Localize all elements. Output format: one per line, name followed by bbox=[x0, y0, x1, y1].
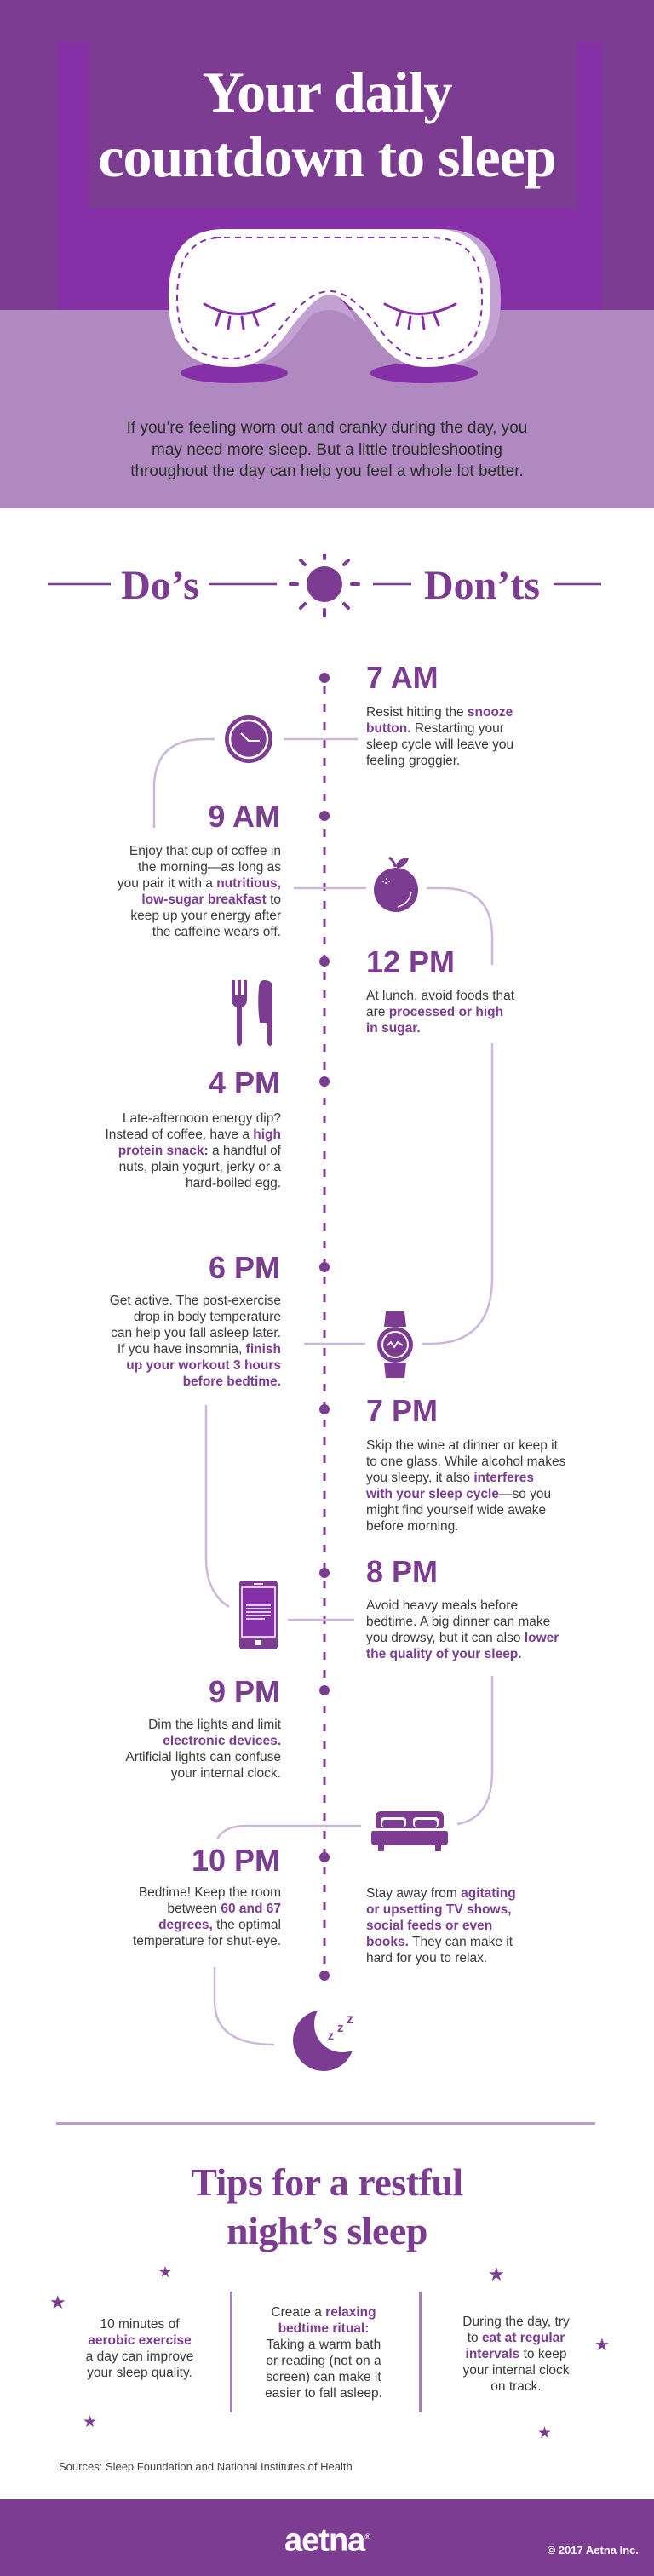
text: If you have insomnia, finish bbox=[118, 1342, 281, 1357]
tip 2: Create a relaxing bbox=[271, 2305, 376, 2320]
entry: 7 AM: 7 AM bbox=[366, 660, 439, 695]
text: Artificial lights can confuse bbox=[125, 1750, 281, 1764]
stars: ★ bbox=[537, 2424, 552, 2442]
stars: ★ bbox=[158, 2263, 172, 2281]
text: you sleepy, it also interferes bbox=[366, 1471, 534, 1485]
icon: moon with zzz bbox=[293, 2010, 353, 2071]
entry: 7 PM: 7 PM bbox=[366, 1393, 438, 1428]
text: low-sugar breakfast to bbox=[141, 892, 281, 907]
stars: ★ bbox=[594, 2336, 610, 2355]
icon: sun bbox=[290, 552, 359, 617]
timeline with connectors and icons bbox=[153, 673, 494, 2071]
stars bbox=[49, 2263, 610, 2442]
icon: fork and knife bbox=[232, 980, 272, 1046]
tip 1: aerobic exercise bbox=[88, 2333, 192, 2348]
heading: tips bbox=[191, 2160, 463, 2252]
entry: 10 PM don't bbox=[366, 1886, 516, 1965]
entry: 10 PM don't: books. They can make it bbox=[366, 1935, 513, 1949]
text: At lunch, avoid foods that bbox=[366, 989, 514, 1003]
icon: clock bbox=[225, 715, 272, 763]
text: keep up your energy after bbox=[130, 909, 281, 923]
text: Instead of coffee, have a high bbox=[105, 1127, 281, 1142]
text: protein snack: a handful of bbox=[118, 1144, 281, 1158]
icon: moon with zzz: z bbox=[347, 2012, 353, 2027]
text: your internal clock. bbox=[171, 1766, 281, 1781]
text: in sugar. bbox=[366, 1021, 421, 1036]
tip 1: your sleep quality. bbox=[87, 2366, 192, 2380]
text: nuts, plain yogurt, jerky or a bbox=[119, 1160, 281, 1174]
tip 3: your internal clock bbox=[463, 2363, 569, 2378]
text: are processed or high bbox=[366, 1005, 503, 1019]
entry: 10 PM don't: social feeds or even bbox=[366, 1919, 492, 1933]
tip 2 bbox=[265, 2305, 382, 2401]
text: bedtime. A big dinner can make bbox=[366, 1615, 550, 1629]
stars: ★ bbox=[49, 2292, 66, 2313]
icon: bed bbox=[371, 1811, 448, 1851]
text: between 60 and 67 bbox=[167, 1902, 281, 1916]
tip 1: a day can improve bbox=[86, 2349, 193, 2364]
text: you drowsy, but it can also lower bbox=[366, 1631, 559, 1645]
text: can help you fall asleep later. bbox=[111, 1326, 281, 1340]
text: sleep cycle will leave you bbox=[366, 737, 513, 752]
tip 3: to eat at regular bbox=[468, 2331, 565, 2345]
text: temperature for shut-eye. bbox=[133, 1934, 281, 1948]
icon: sleep mask bbox=[169, 229, 501, 383]
text: Avoid heavy meals before bbox=[366, 1598, 518, 1613]
tip 3: intervals to keep bbox=[466, 2347, 566, 2361]
text: you pair it with a nutritious, bbox=[118, 876, 281, 891]
intro text bbox=[127, 419, 527, 480]
text: electronic devices. bbox=[163, 1734, 281, 1748]
entry: 9 AM: 9 AM bbox=[208, 799, 280, 834]
header background bbox=[0, 0, 654, 508]
text: feeling groggier. bbox=[366, 754, 460, 768]
tip 3 bbox=[462, 2315, 570, 2394]
intro text: If you’re feeling worn out and cranky during the day, you bbox=[127, 419, 527, 437]
text: Late-afternoon energy dip? bbox=[123, 1111, 281, 1126]
text: the quality of your sleep. bbox=[366, 1647, 522, 1661]
text: degrees, the optimal bbox=[158, 1918, 281, 1932]
entry: 8 PM: 8 PM bbox=[366, 1554, 438, 1589]
entry: 6 PM: 6 PM bbox=[209, 1250, 280, 1285]
stars: ★ bbox=[488, 2263, 505, 2285]
tip 2: or reading (not on a bbox=[266, 2354, 382, 2368]
entry: 10 PM don't: Stay away from agitating bbox=[366, 1886, 516, 1901]
text: up your workout 3 hours bbox=[126, 1358, 281, 1373]
logo: aetna® bbox=[284, 2523, 370, 2559]
heading: Do's and Don'ts: Don’ts bbox=[424, 563, 540, 608]
entry: 10 PM don't: hard for you to relax. bbox=[366, 1951, 487, 1965]
text: with your sleep cycle—so you bbox=[366, 1487, 551, 1501]
text: drop in body temperature bbox=[134, 1310, 281, 1324]
icon: phone bbox=[239, 1581, 278, 1649]
entry: 10 PM: 10 PM bbox=[192, 1843, 280, 1878]
entry: 4 PM: 4 PM bbox=[209, 1065, 280, 1100]
text: hard-boiled egg. bbox=[186, 1176, 281, 1190]
entry: 10 PM don't: or upsetting TV shows, bbox=[366, 1902, 512, 1917]
icon: orange bbox=[374, 857, 418, 912]
stars: ★ bbox=[83, 2413, 97, 2431]
entry: 9 PM: 9 PM bbox=[209, 1674, 280, 1709]
text: Dim the lights and limit bbox=[148, 1718, 281, 1732]
text: button. Restarting your bbox=[366, 721, 504, 736]
text: before morning. bbox=[366, 1519, 459, 1534]
tip 2: screen) can make it bbox=[266, 2370, 382, 2384]
tip 2: bedtime ritual: bbox=[278, 2321, 369, 2336]
text: the caffeine wears off. bbox=[152, 925, 281, 939]
text: Skip the wine at dinner or keep it bbox=[366, 1438, 558, 1453]
icon: moon with zzz: z bbox=[328, 2028, 334, 2042]
sources: Sources: Sleep Foundation and National Institutes of Health bbox=[59, 2460, 353, 2473]
text: the morning—as long as bbox=[138, 860, 281, 875]
tip 3: During the day, try bbox=[462, 2315, 570, 2329]
tips panel bbox=[49, 2263, 610, 2442]
intro text: may need more sleep. But a little troubleshooting bbox=[152, 441, 502, 458]
copyright: © 2017 Aetna Inc. bbox=[548, 2544, 639, 2556]
text: Get active. The post-exercise bbox=[110, 1294, 281, 1308]
heading: tips: night’s sleep bbox=[227, 2209, 427, 2252]
tip 2: easier to fall asleep. bbox=[265, 2386, 382, 2401]
tip 2: Taking a warm bath bbox=[267, 2338, 381, 2352]
tip 1: 10 minutes of bbox=[100, 2317, 180, 2332]
intro text: throughout the day can help you feel a whole lot better. bbox=[130, 462, 524, 480]
heading: Do's and Don'ts bbox=[48, 554, 601, 617]
text: Enjoy that cup of coffee in bbox=[129, 844, 281, 858]
text: Bedtime! Keep the room bbox=[139, 1885, 281, 1900]
tip 3: on track. bbox=[490, 2379, 542, 2394]
text: to one glass. While alcohol makes bbox=[366, 1454, 565, 1469]
heading: tips: Tips for a restful bbox=[191, 2160, 463, 2204]
text: might find yourself wide awake bbox=[366, 1503, 546, 1517]
text: before bedtime. bbox=[183, 1374, 281, 1389]
icon: watch bbox=[377, 1311, 413, 1378]
title bbox=[98, 60, 556, 189]
entry: 12 PM: 12 PM bbox=[366, 944, 455, 979]
footer bbox=[0, 2499, 654, 2576]
title: Your daily bbox=[203, 60, 451, 124]
heading: Do's and Don'ts: Do’s bbox=[121, 563, 199, 608]
tip 1 bbox=[86, 2317, 193, 2380]
text: Resist hitting the snooze bbox=[366, 705, 513, 720]
title: countdown to sleep bbox=[98, 124, 556, 189]
icon: moon with zzz: z bbox=[337, 2021, 344, 2035]
